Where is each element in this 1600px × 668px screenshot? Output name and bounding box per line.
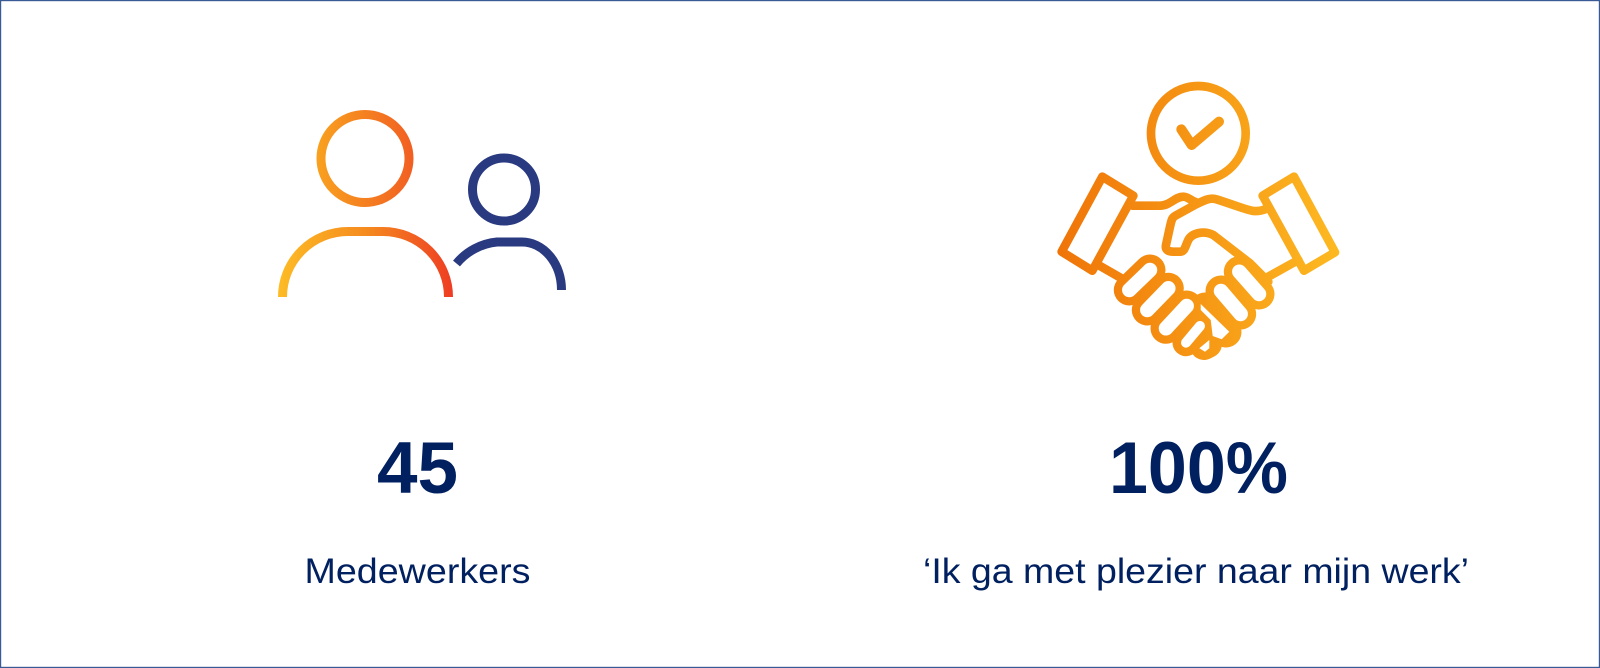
large person body	[282, 232, 448, 297]
icon: handshake with check mark	[1057, 82, 1340, 360]
stat number: 100%: 100%	[1109, 428, 1288, 509]
stat label: quote: ‘Ik ga met plezier naar mijn werk’	[923, 552, 1469, 591]
stat number: 45: 45	[377, 428, 458, 509]
small person body	[456, 242, 562, 290]
icon: two people	[282, 114, 562, 297]
large person head	[321, 114, 409, 202]
stat label: Medewerkers: Medewerkers	[304, 552, 530, 591]
small person head	[472, 158, 536, 221]
